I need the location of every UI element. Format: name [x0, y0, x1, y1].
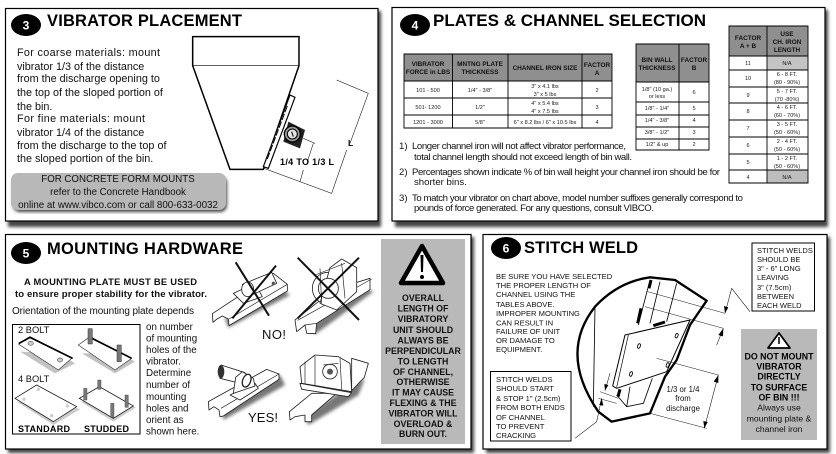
- table: channel iron length: A + B: [740, 43, 757, 50]
- text block: placement instructions: For coarse materials: mount: [17, 47, 160, 59]
- callout: stitch weld length: [752, 243, 814, 311]
- table: channel iron length: 9: [746, 93, 750, 99]
- table: factor A: 1/4" - 3/8": [468, 88, 492, 94]
- table: factor B: or less: [649, 94, 665, 100]
- callout: concrete form mounts: [11, 173, 227, 212]
- text block: placement instructions: the top of the sloped portion of: [17, 87, 164, 99]
- text block: warning: VIBRATORY: [398, 314, 448, 324]
- table: factor A: FACTOR: [584, 62, 610, 69]
- text block: orientation instructions: on number: [146, 322, 194, 333]
- heading: vibrator placement: VIBRATOR PLACEMENT: [47, 12, 242, 30]
- callout: stitch weld length: SHOULD BE: [757, 255, 800, 264]
- text block: placement instructions: vibrator 1/3 of the distance: [17, 61, 144, 73]
- text block: orientation instructions: holes of the: [146, 345, 197, 356]
- panel: mounting hardware: [6, 234, 474, 453]
- table: channel iron length: (50 - 60%): [774, 164, 800, 170]
- text block: placement instructions: vibrator 1/4 of the distance: [17, 127, 144, 139]
- label: distance from discharge: [666, 385, 700, 413]
- text block: numbered notes: pounds of force generated. For any questions, consult VIBCO.: [414, 203, 654, 214]
- text block: mounting plate requirement: to ensure proper stability for the vibrator.: [15, 289, 207, 300]
- callout: stitch weld length: EACH WELD: [757, 301, 802, 310]
- text block: placement instructions: the sloped portion of the bin.: [17, 153, 153, 165]
- table: channel iron length: USE: [780, 31, 794, 38]
- text block: numbered notes: Percentages shown indicate % of bin wall height your channel iron should be for: [412, 167, 721, 178]
- badge: step 6: [491, 237, 521, 259]
- table: channel iron length: FACTOR: [735, 35, 761, 42]
- callout: stitch weld start and stop: STITCH WELDS: [496, 375, 553, 384]
- text block: warning: [385, 293, 462, 439]
- text block: warning: DIRECTLY: [757, 372, 801, 382]
- text block: channel selection warning: TABLES ABOVE.: [496, 300, 555, 309]
- table: factor B: [636, 44, 709, 150]
- icon: small warning triangle: [768, 333, 790, 348]
- table: channel iron length: 6 - 8 FT.: [777, 72, 798, 78]
- text block: orientation instructions: mounting: [146, 392, 186, 403]
- text block: warning: Always use: [757, 402, 801, 412]
- text block: orientation instructions: number of: [146, 380, 190, 391]
- text block: channel selection warning: BE SURE YOU HAVE SELECTED: [496, 272, 613, 281]
- text block: warning: OVERLOAD &: [394, 419, 453, 429]
- badge: step 3: [11, 14, 41, 36]
- table: channel iron length: (80 - 90%): [774, 80, 800, 86]
- table: factor A: A: [595, 70, 600, 77]
- diagram: hopper with mounted vibrator: [193, 37, 368, 193]
- text block: numbered notes: shorter bins.: [414, 177, 467, 188]
- text block: placement instructions: the bin.: [17, 101, 52, 113]
- text block: warning: OVERALL: [402, 293, 445, 303]
- table: channel iron length: (60 - 70%): [774, 113, 800, 119]
- table: factor A: 4: [595, 120, 599, 126]
- text block: orientation instructions: Determine: [146, 368, 192, 379]
- panel: stitch weld: [483, 234, 830, 453]
- table: channel iron length: 4 - 6 FT.: [777, 105, 798, 111]
- callout: stitch weld start and stop: [490, 372, 571, 441]
- callout: stitch weld start and stop: TO PREVENT: [496, 422, 545, 431]
- table: factor B: 1/8" - 1/4": [645, 106, 669, 112]
- text block: placement instructions: For fine materials: mount: [17, 113, 145, 125]
- callout: stitch weld start and stop: & STOP 1" (2.5cm): [496, 394, 561, 403]
- table: factor A: 2: [595, 88, 599, 94]
- table: factor A: 4" x 7.5 lbs: [531, 109, 559, 115]
- table: channel iron length: (70 -80%): [775, 97, 799, 103]
- table: channel iron length: N/A: [782, 175, 792, 181]
- table: factor B: 1/8" (10 ga.): [642, 87, 672, 93]
- table: factor B: B: [692, 65, 697, 72]
- callout: concrete form mounts: FOR CONCRETE FORM MOUNTS: [41, 174, 195, 185]
- label: standard: STANDARD: [18, 424, 70, 434]
- table: channel iron length: 3 - 5 FT.: [777, 122, 798, 128]
- text block: channel selection warning: FAILURE OF UNIT: [496, 327, 560, 336]
- table: factor B: 3: [692, 130, 696, 136]
- table: factor A: 1201 - 3000: [413, 120, 443, 126]
- table: factor B: 3/8" - 1/2": [645, 130, 669, 136]
- callout: stitch weld start and stop: SHOULD START: [496, 384, 554, 393]
- table: factor A: [404, 54, 612, 128]
- callout: stitch weld length: 3" - 6" LONG: [757, 264, 801, 273]
- callout: stitch weld length: STITCH WELDS: [757, 246, 813, 255]
- text block: warning: IT MAY CAUSE: [392, 388, 454, 398]
- text block: channel selection warning: [496, 272, 613, 354]
- text block: placement instructions: [17, 47, 167, 165]
- table: channel iron length: 6: [746, 143, 750, 149]
- text block: placement instructions: from the discharge to the top of: [17, 140, 167, 152]
- table: factor A: 3: [595, 105, 599, 111]
- text block: warning: LENGTH OF: [398, 303, 449, 313]
- table: channel iron length: 8: [746, 109, 750, 115]
- table: factor A: 5/8": [475, 120, 485, 126]
- table: channel iron length: 7: [746, 126, 750, 132]
- text block: warning: TO LENGTH: [398, 356, 448, 366]
- text block: warning: OF BIN !!!: [758, 392, 800, 402]
- table: factor B: THICKNESS: [639, 65, 676, 72]
- text block: numbered notes: 1): [399, 141, 408, 152]
- table: channel iron length: (50 - 60%): [774, 147, 800, 153]
- badge: step 4: 4: [412, 18, 419, 32]
- text block: warning: TO SURFACE: [751, 382, 807, 392]
- badge: step 5: [11, 242, 41, 264]
- table: factor A: 3" x 4.1 lbs: [531, 84, 559, 90]
- callout: do not mount directly: [741, 329, 817, 440]
- table: factor A: CHANNEL IRON SIZE: [513, 65, 578, 72]
- text block: orientation instructions: vibrator.: [146, 356, 181, 368]
- table: channel iron length: CH. IRON: [773, 39, 802, 46]
- callout: overall length warning: [381, 239, 465, 444]
- callout: stitch weld start and stop: FROM BOTH ENDS: [496, 403, 565, 412]
- icon: warning triangle: [401, 246, 443, 283]
- table: factor A: 501- 1200: [415, 105, 441, 111]
- text block: numbered notes: 2): [399, 167, 408, 178]
- text block: numbered notes: Longer channel iron will not affect vibrator performance,: [412, 141, 626, 152]
- table: channel iron length: 2 - 4 FT.: [777, 139, 798, 145]
- text block: channel selection warning: CAN RESULT IN: [496, 318, 553, 328]
- badge: step 4: [400, 14, 430, 36]
- table: channel iron length: (50 - 60%): [774, 130, 800, 136]
- text block: warning: OTHERWISE: [396, 377, 450, 387]
- label: studded: STUDDED: [84, 424, 130, 434]
- label: distance from discharge: 1/3 or 1/4: [667, 385, 700, 394]
- text block: warning: mounting plate &: [747, 414, 812, 424]
- table: factor A: 4" x 5.4 lbs: [531, 101, 559, 107]
- text block: mounting plate requirement: [12, 276, 207, 317]
- table: factor B: 4: [692, 118, 696, 124]
- label: distance from discharge: from: [675, 394, 691, 403]
- text block: orientation instructions: [146, 322, 199, 438]
- table: channel iron length: 5 - 7 FT.: [777, 89, 798, 95]
- table: factor A: MNTNG PLATE: [457, 61, 504, 68]
- panel: plates and channel selection: [392, 8, 828, 227]
- text block: channel selection warning: EQUIPMENT.: [496, 345, 542, 354]
- table: factor B: 6: [692, 90, 696, 96]
- table: factor A: 101 - 500: [416, 88, 440, 94]
- callout: concrete form mounts: refer to the Concrete Handbook: [50, 187, 186, 198]
- badge: step 5: 5: [23, 246, 30, 260]
- text block: orientation instructions: of mounting: [146, 334, 197, 344]
- text block: warning: DO NOT MOUNT: [745, 352, 814, 362]
- heading: stitch weld: STITCH WELD: [524, 239, 638, 257]
- table: channel iron length: N/A: [782, 61, 792, 67]
- table: factor B: 5: [692, 106, 696, 112]
- text block: warning: VIBRATOR: [756, 362, 802, 372]
- label: yes: YES!: [248, 410, 278, 425]
- table: factor B: 1/4" - 3/8": [645, 118, 669, 124]
- text block: warning: UNIT SHOULD: [393, 325, 453, 335]
- text block: orientation instructions: orient as: [146, 415, 184, 426]
- callout: stitch weld length: BETWEEN: [757, 292, 794, 301]
- text block: numbered notes: [399, 141, 743, 214]
- diagram: weld detail: [575, 277, 750, 438]
- figure: plate orientation box: [12, 324, 140, 434]
- text block: warning: OF CHANNEL,: [393, 367, 453, 377]
- callout: stitch weld length: 3" (7.5cm): [757, 283, 792, 292]
- table: factor B: FACTOR: [681, 57, 707, 64]
- text block: warning: BURN OUT.: [399, 429, 447, 439]
- illustration: incorrect mounting: [212, 258, 373, 334]
- text block: channel selection warning: IMPROPER MOUNTING: [496, 309, 580, 318]
- text block: numbered notes: 3): [399, 193, 408, 204]
- label: quarter to third L: 1/4 TO 1/3 L: [280, 157, 334, 167]
- badge: step 6: 6: [503, 242, 510, 256]
- table: factor B: 2: [692, 142, 696, 148]
- label: 4 bolt: 4 BOLT: [18, 374, 50, 384]
- label: no: NO!: [262, 327, 286, 342]
- badge: step 3: 3: [23, 18, 30, 32]
- table: factor B: 1/2" & up: [646, 142, 668, 148]
- text block: warning: PERPENDICULAR: [385, 346, 462, 356]
- text block: numbered notes: total channel length should not exceed length of bin wall.: [414, 152, 632, 163]
- text block: warning: channel iron: [756, 424, 803, 434]
- table: channel iron length: LENGTH: [774, 47, 801, 54]
- text block: channel selection warning: THE PROPER LENGTH OF: [496, 281, 591, 290]
- callout: stitch weld start and stop: OF CHANNEL: [496, 413, 545, 422]
- panel: vibrator placement: [6, 8, 381, 227]
- table: channel iron length: 1 - 2 FT.: [777, 156, 798, 162]
- text block: mounting plate requirement: A MOUNTING PLATE MUST BE USED: [24, 276, 197, 287]
- heading: mounting hardware: MOUNTING HARDWARE: [47, 240, 243, 258]
- text block: placement instructions: from the discharge opening to: [17, 73, 160, 85]
- illustration: correct mounting: [208, 355, 368, 425]
- table: channel iron length: 10: [745, 76, 751, 82]
- label: 2 bolt: 2 BOLT: [18, 325, 50, 335]
- table: channel iron length: 5: [746, 160, 750, 166]
- heading: plates and channel selection: PLATES & CHANNEL SELECTION: [433, 11, 706, 30]
- table: channel iron length: 4: [746, 175, 750, 181]
- text block: orientation instructions: holes and: [146, 404, 188, 414]
- text block: warning: VIBRATOR WILL: [388, 408, 458, 418]
- icon: plates: [15, 329, 136, 425]
- table: channel iron length: [729, 26, 808, 183]
- table: factor A: FORCE in LBS: [406, 69, 451, 76]
- text block: warning: [745, 352, 814, 434]
- table: factor A: 6" x 8.2 lbs / 6" x 10.5 lbs: [514, 120, 577, 126]
- label: L dimension: L: [348, 138, 353, 148]
- callout: stitch weld length: LEAVING: [757, 273, 789, 282]
- table: channel iron length: 11: [745, 61, 751, 67]
- table: factor B: BIN WALL: [642, 57, 673, 64]
- text block: warning: FLEXING & THE: [390, 398, 457, 408]
- callout: concrete form mounts: online at www.vibco.com or call 800-633-0032: [18, 200, 218, 211]
- text block: warning: ALWAYS BE: [397, 336, 449, 346]
- text block: mounting plate requirement: Orientation of the mounting plate depends: [12, 306, 194, 317]
- callout: stitch weld start and stop: CRACKING: [496, 431, 536, 440]
- text block: channel selection warning: OR DAMAGE TO: [496, 336, 555, 345]
- table: factor A: 3" x 5 lbs: [534, 92, 557, 98]
- text block: orientation instructions: shown here.: [146, 426, 199, 438]
- table: factor A: 1/2": [475, 105, 485, 111]
- label: distance from discharge: discharge: [666, 404, 700, 413]
- text block: numbered notes: To match your vibrator on chart above, model number suffixes generally correspond to: [412, 193, 743, 204]
- text block: channel selection warning: CHANNEL USING THE: [496, 290, 575, 299]
- table: factor A: THICKNESS: [462, 69, 499, 76]
- table: factor A: VIBRATOR: [412, 61, 445, 68]
